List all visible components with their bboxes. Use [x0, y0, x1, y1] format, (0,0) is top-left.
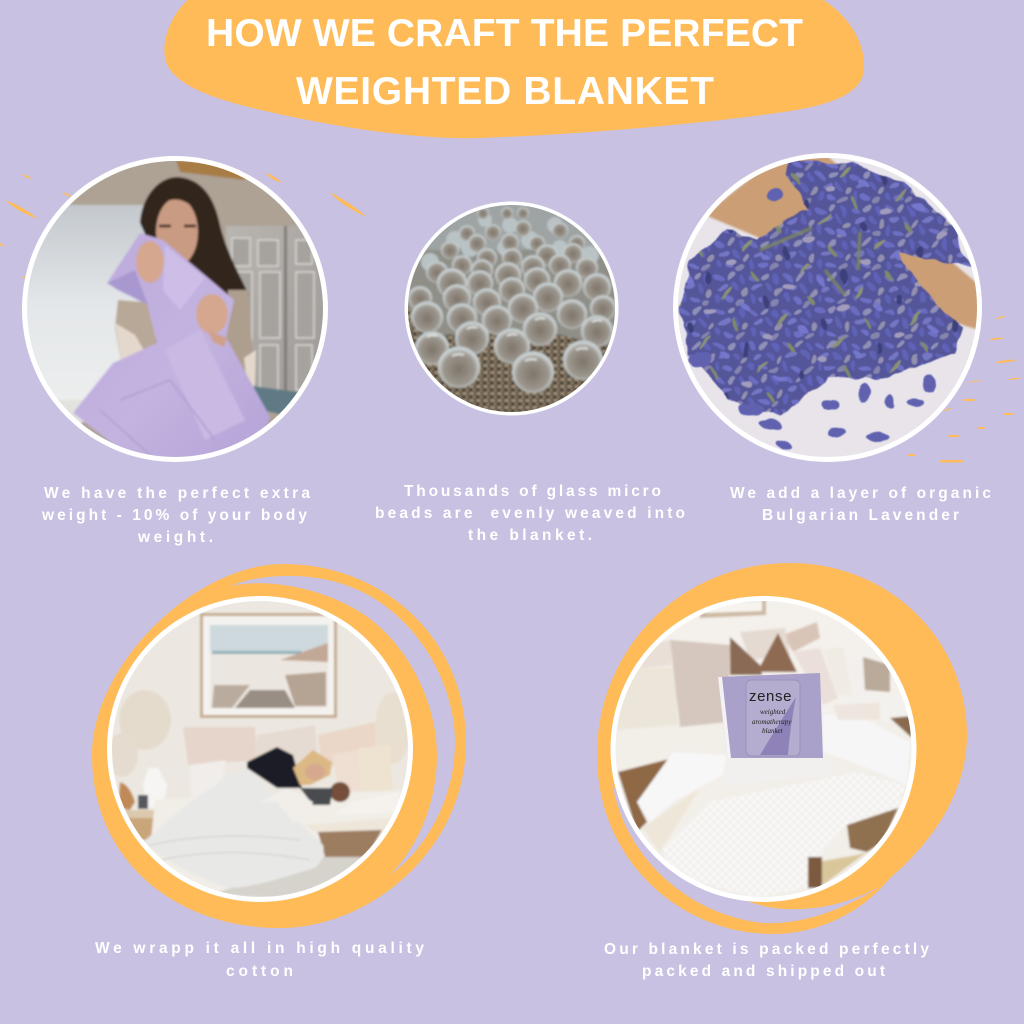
hands [136, 241, 164, 283]
pampas and vase [119, 690, 171, 750]
brown throw [618, 758, 673, 832]
swirl behind bed photo [92, 564, 466, 928]
box: aromatherapy [752, 718, 792, 726]
caption: packing: Our blanket is packed perfectly [604, 941, 929, 958]
bed [150, 790, 394, 835]
box [718, 673, 823, 758]
caption: extra weight: We have the perfect extra [44, 485, 310, 502]
banner blob [164, 0, 864, 138]
basket [847, 808, 898, 852]
blanket [73, 233, 270, 462]
hair [138, 176, 247, 296]
pillows [183, 727, 257, 765]
caption: extra weight [41, 485, 310, 546]
caption: extra weight: weight - 10% of your body [41, 507, 307, 524]
photo: packed Zense box on bed [610, 595, 920, 912]
caption: lavender: Bulgarian Lavender [762, 507, 959, 524]
caption: lavender [730, 485, 991, 524]
face [156, 198, 198, 266]
caption: glass beads: beads are evenly weaved into [375, 505, 685, 522]
caption: glass beads: the blanket. [468, 527, 592, 544]
rumpled white quilt [637, 752, 727, 822]
framed art [200, 613, 337, 718]
caption: lavender: We add a layer of organic [730, 485, 991, 502]
woman [247, 747, 302, 788]
caption: packing [604, 941, 929, 980]
photo: woman smelling lavender blanket [20, 150, 330, 470]
wooden scoop [705, 150, 985, 332]
heading [206, 12, 803, 113]
caption: glass beads: Thousands of glass micro [404, 483, 661, 500]
heading: HOW WE CRAFT THE PERFECT [206, 12, 803, 55]
bedspread [662, 772, 905, 898]
caption: packing: packed and shipped out [642, 963, 885, 980]
lavender pile [680, 160, 972, 450]
sleeves [114, 299, 155, 350]
caption: cotton [95, 940, 424, 980]
decorative dashes left [0, 173, 367, 279]
box: zense [749, 688, 792, 705]
heading: WEIGHTED BLANKET [296, 70, 714, 113]
forearm [145, 278, 163, 305]
title banner [164, 0, 864, 138]
caption: glass beads [375, 483, 685, 544]
swirl behind box photo [597, 563, 967, 934]
photo: glass micro beads [400, 200, 625, 420]
photo: dried lavender [670, 150, 990, 470]
back pillows [640, 640, 672, 668]
decorative dashes right [908, 316, 1022, 462]
photo: mother and child under blanket [105, 595, 415, 910]
white blanket [145, 796, 326, 888]
box: weighted [760, 708, 786, 716]
caption: cotton: cotton [226, 963, 293, 980]
child [330, 782, 350, 802]
caption: extra weight: weight. [137, 529, 213, 546]
caption: cotton: We wrapp it all in high quality [95, 940, 424, 957]
box: blanket [762, 727, 784, 735]
bed [610, 722, 920, 912]
